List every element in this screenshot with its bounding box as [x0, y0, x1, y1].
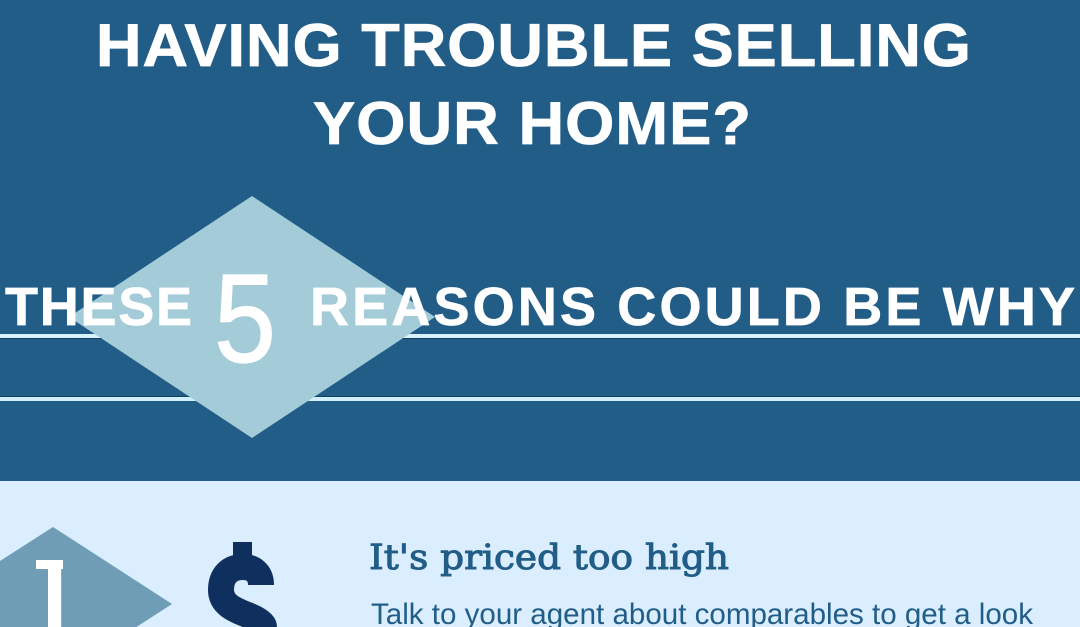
- number 1: [36, 560, 63, 627]
- icon: dollar sign: [221, 542, 264, 627]
- subtitle: REASONS COULD BE WHY: [310, 277, 1075, 337]
- number diamond: [0, 527, 172, 627]
- reason panel: [0, 481, 1080, 627]
- title: HAVING TROUBLE SELLING: [96, 12, 972, 79]
- header panel: [0, 0, 1080, 481]
- subtitle: THESE: [5, 277, 192, 337]
- big number 5: 5: [214, 248, 276, 389]
- reason heading: It's priced too high: [369, 538, 729, 578]
- title: YOUR HOME?: [313, 90, 752, 157]
- ribbon lines: [0, 334, 1080, 401]
- title: [96, 12, 972, 157]
- diamond badge: [69, 196, 435, 438]
